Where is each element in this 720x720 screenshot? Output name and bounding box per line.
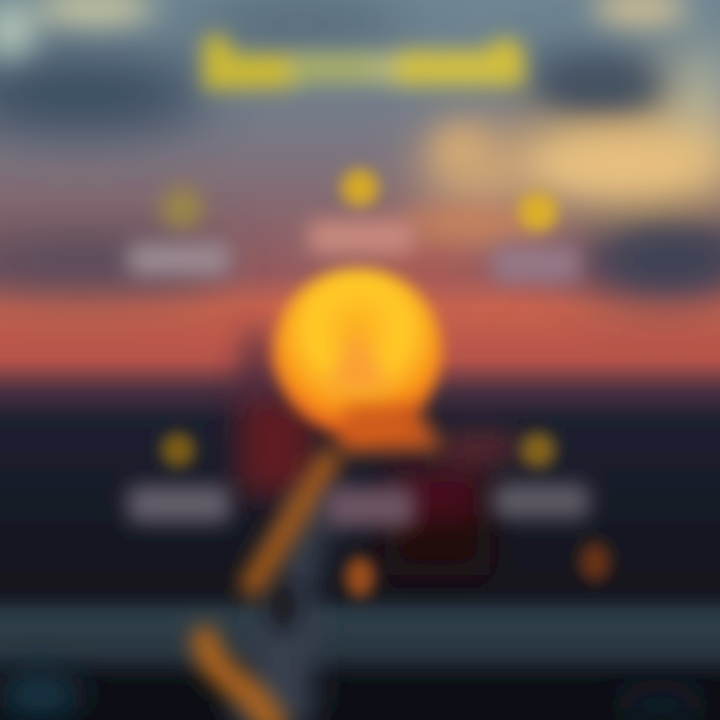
- text block: top right: [492, 246, 580, 282]
- text block: lower left: [128, 486, 230, 522]
- arrow: diagonal orange streak: [252, 462, 328, 585]
- clouds: [0, 0, 720, 296]
- icon: lower right: [520, 432, 556, 468]
- icon: lower center dot: [345, 557, 375, 597]
- bottom-left blue glow: [0, 669, 80, 720]
- text block: lower right: [493, 484, 589, 518]
- lit roof: [445, 435, 515, 459]
- left building: [238, 400, 313, 495]
- sun: [274, 268, 444, 452]
- bottom-right blue glow: [620, 689, 700, 720]
- icon: top left: [161, 187, 203, 229]
- arrow: lower-left orange curve: [205, 640, 272, 720]
- icon: lower left: [161, 433, 195, 467]
- icon: top center: [341, 169, 379, 207]
- bottom road band: [0, 605, 720, 637]
- sun inner glyph: [325, 322, 392, 392]
- icon: lower right dot: [579, 542, 611, 582]
- text block: top center: [308, 220, 414, 254]
- tower: [238, 325, 276, 400]
- text block: lower center: [325, 487, 415, 527]
- icon: top right: [518, 192, 558, 232]
- arrow: lower-center orange bar: [325, 672, 355, 720]
- title band: [203, 36, 525, 90]
- grey path: [225, 490, 335, 720]
- city silhouette: [238, 325, 515, 575]
- right building: [385, 475, 490, 575]
- text block: top left: [128, 243, 230, 275]
- sun base: [335, 405, 444, 452]
- dark figure: [269, 579, 297, 631]
